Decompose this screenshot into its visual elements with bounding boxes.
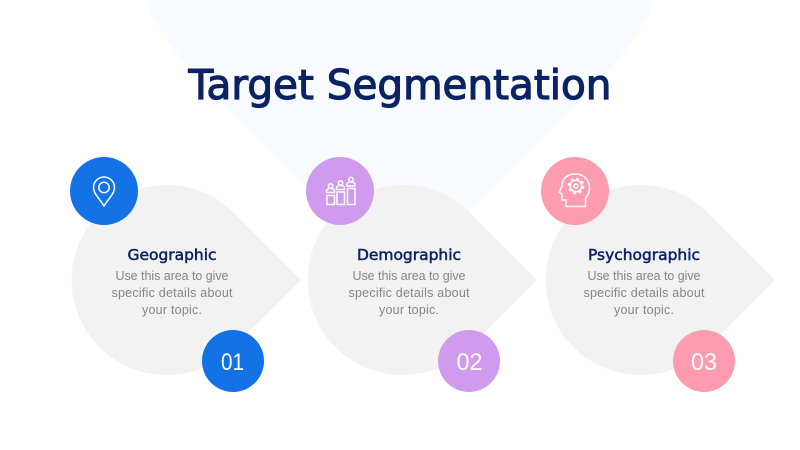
number badge 02: 02 bbox=[456, 349, 482, 376]
text: psychographic description: Use this area to give bbox=[588, 269, 701, 283]
text: geographic description: your topic. bbox=[142, 303, 202, 317]
text: demographic description: your topic. bbox=[379, 303, 439, 317]
heading: demographic: Demographic bbox=[357, 246, 461, 264]
text: psychographic description: your topic. bbox=[614, 303, 674, 317]
text: psychographic description: specific details about bbox=[584, 286, 705, 300]
teardrop card 3 bbox=[546, 185, 775, 375]
number badge 01 bbox=[202, 330, 264, 392]
heading: psychographic: Psychographic bbox=[588, 246, 700, 264]
panel: demographic bbox=[306, 157, 537, 392]
number badge 02 bbox=[438, 330, 500, 392]
teardrop card 2 bbox=[308, 185, 537, 375]
text: demographic description: Use this area to give bbox=[352, 269, 466, 283]
icon: location pin bbox=[70, 157, 138, 225]
text: demographic description: specific details about bbox=[348, 286, 470, 300]
number badge 03: 03 bbox=[691, 349, 717, 376]
title: Target Segmentation bbox=[188, 61, 612, 109]
number badge 03 bbox=[673, 330, 735, 392]
icon: head with gear bbox=[541, 157, 609, 225]
text: geographic description: Use this area to give bbox=[116, 269, 229, 283]
text: geographic description: specific details about bbox=[112, 286, 233, 300]
heading: geographic: Geographic bbox=[128, 246, 216, 264]
panel: psychographic bbox=[541, 157, 775, 392]
teardrop card 1 bbox=[72, 185, 301, 375]
number badge 01: 01 bbox=[221, 349, 244, 376]
background teardrop bbox=[120, 0, 680, 280]
icon: people on bars bbox=[306, 157, 374, 225]
panel: geographic bbox=[70, 157, 301, 392]
